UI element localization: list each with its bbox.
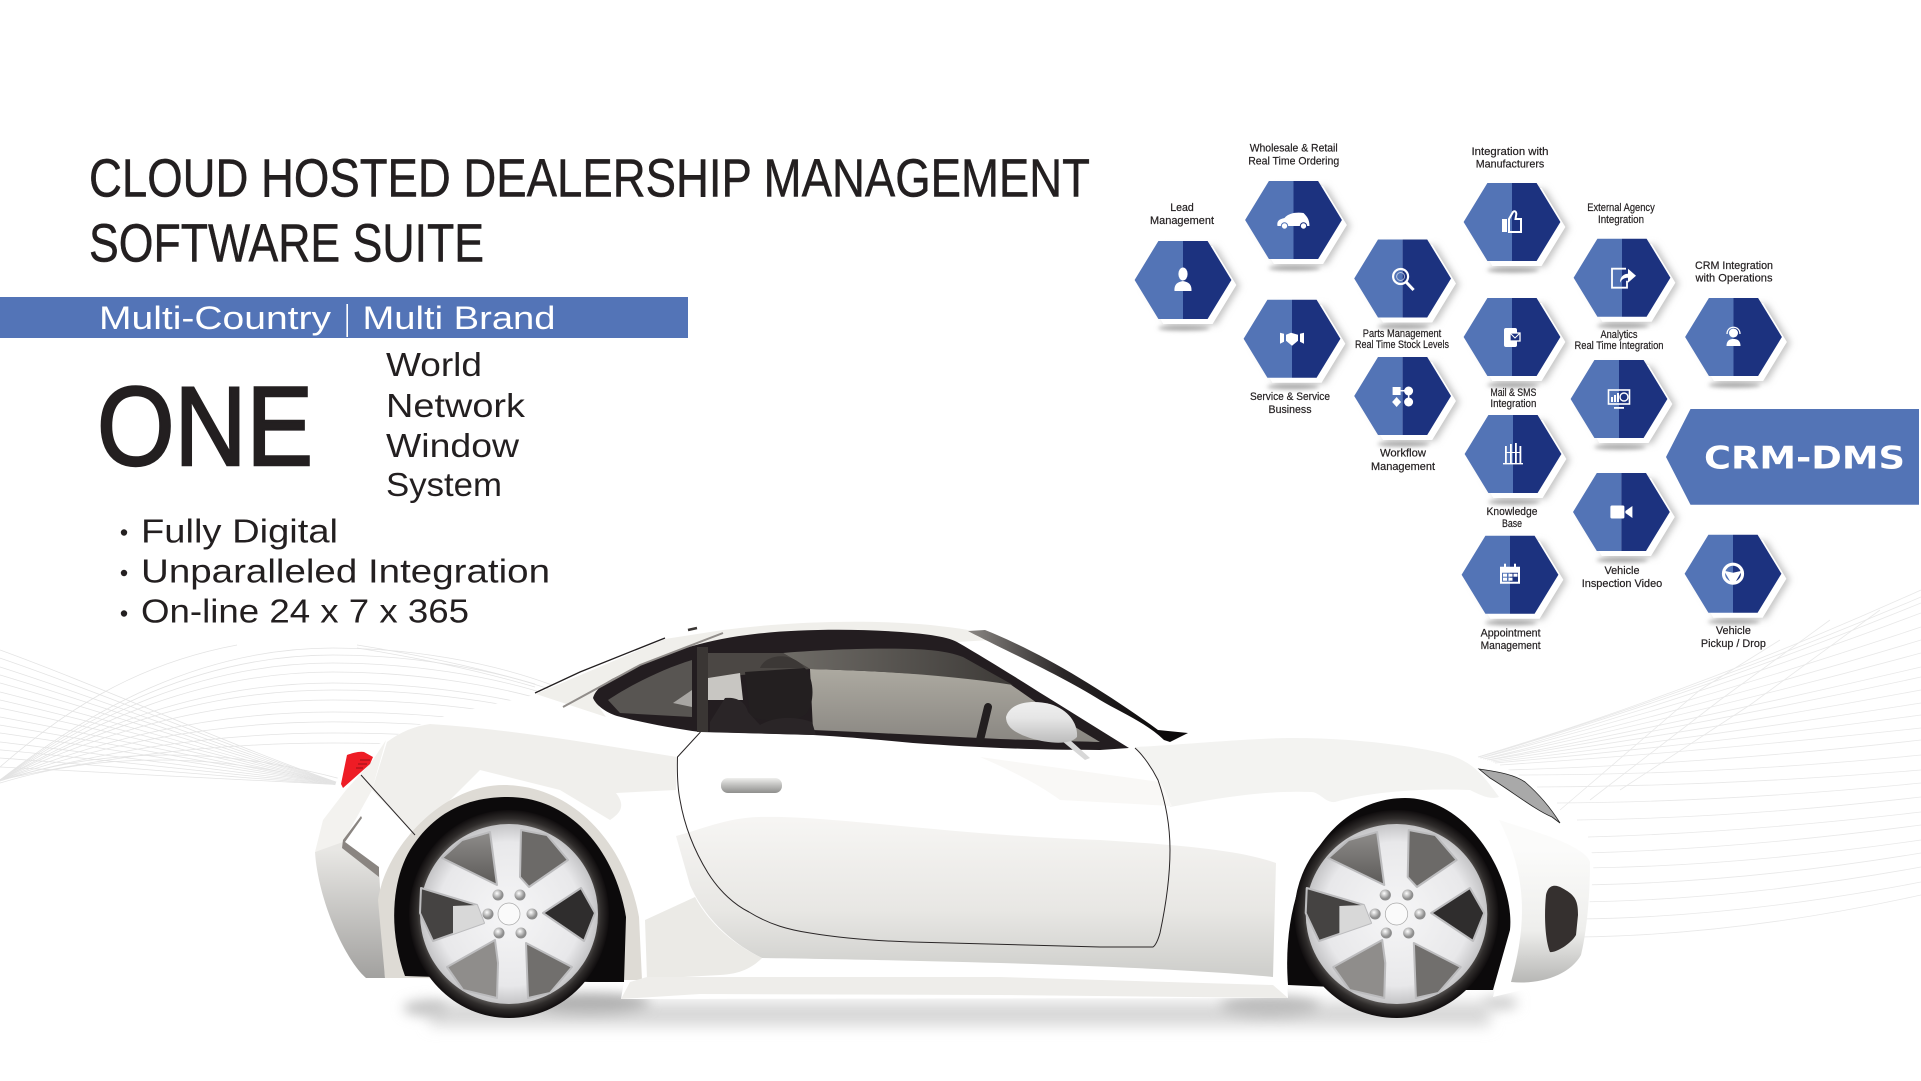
b-pillar and interior xyxy=(697,647,708,732)
label: analytics integration xyxy=(1574,329,1664,352)
text block: world network window system: Window xyxy=(386,427,519,464)
label: parts management: Parts Management xyxy=(1363,328,1441,340)
label: mail and sms xyxy=(1490,387,1536,410)
label: mail and sms: Mail & SMS xyxy=(1490,387,1536,399)
hexagon: appointment management xyxy=(1462,536,1567,625)
hexagon: service business xyxy=(1244,300,1349,389)
label: knowledge base xyxy=(1486,506,1538,530)
label: knowledge base: Base xyxy=(1502,518,1522,530)
bullet list: Fully Digital xyxy=(141,512,338,550)
banner: multi-country, multi brand: Multi Brand xyxy=(362,300,556,336)
label: vehicle inspection video: Inspection Video xyxy=(1582,578,1662,590)
label: wholesale and retail: Real Time Ordering xyxy=(1248,155,1339,167)
title: CLOUD HOSTED DEALERSHIP MANAGEMENT xyxy=(89,148,1090,208)
hexagon: vehicle pickup and drop xyxy=(1685,535,1790,624)
hexagon: knowledge base xyxy=(1465,415,1570,505)
label: external agency integration: Integration xyxy=(1598,214,1644,226)
label: appointment management: Appointment xyxy=(1481,628,1541,640)
window strut xyxy=(980,707,988,740)
bullet list: On-line 24 x 7 x 365 xyxy=(141,592,469,630)
label: appointment management: Management xyxy=(1481,640,1541,652)
label: external agency integration: External Agency xyxy=(1587,202,1655,214)
label: integration with manufacturers: Integration with xyxy=(1472,146,1548,158)
label: wholesale and retail: Wholesale & Retail xyxy=(1250,143,1338,155)
label: parts management xyxy=(1355,328,1449,351)
rear fender panel xyxy=(372,724,677,835)
bullet list: Unparalleled Integration xyxy=(141,552,550,590)
label: analytics integration: Real Time Integration xyxy=(1574,340,1664,352)
label: workflow management: Workflow xyxy=(1380,448,1426,460)
left background wave lines xyxy=(0,645,552,787)
text block: world network window system: Network xyxy=(386,387,526,424)
door shoulder shading xyxy=(980,757,1172,806)
label: mail and sms: Integration xyxy=(1490,398,1536,410)
hood highlight xyxy=(1135,738,1499,807)
label: integration with manufacturers: Manufacturers xyxy=(1476,159,1545,171)
label: vehicle pickup and drop: Pickup / Drop xyxy=(1701,638,1766,650)
roof and rear pillar highlight xyxy=(536,622,990,717)
label: lead management xyxy=(1150,202,1214,227)
label: lead management: Management xyxy=(1150,215,1214,227)
rear quarter glass xyxy=(608,660,692,717)
hexagon: integration with manufacturers xyxy=(1464,183,1569,273)
car ground shadow xyxy=(403,993,1518,1026)
rear bumper xyxy=(315,840,385,978)
title: SOFTWARE SUITE xyxy=(89,214,484,274)
label: knowledge base: Knowledge xyxy=(1486,506,1538,518)
roof trim lines xyxy=(535,628,723,707)
label: vehicle inspection video: Vehicle xyxy=(1604,565,1640,577)
heading: ONE: ONE xyxy=(97,364,313,489)
label: vehicle pickup and drop xyxy=(1701,625,1766,650)
hexagon: lead management xyxy=(1135,241,1240,331)
badge: CRM-DMS xyxy=(1666,409,1919,505)
rear wheel xyxy=(409,810,609,1018)
hexagon: vehicle inspection video xyxy=(1573,473,1679,563)
label: analytics integration: Analytics xyxy=(1600,329,1638,341)
car seat xyxy=(710,656,816,735)
car illustration xyxy=(315,620,1593,1026)
hexagon: analytics integration xyxy=(1571,360,1676,450)
front wheel arch xyxy=(1287,798,1510,990)
window frame xyxy=(593,630,1129,750)
label: appointment management xyxy=(1481,628,1541,652)
car body xyxy=(315,620,1593,999)
tinted glass band xyxy=(783,649,1013,685)
label: service business: Service & Service xyxy=(1250,391,1330,403)
hexagon: crm integration with operations xyxy=(1685,298,1791,388)
windshield xyxy=(968,630,1188,742)
front bumper xyxy=(1499,820,1590,983)
label: parts management: Real Time Stock Levels xyxy=(1355,339,1449,351)
badge: CRM-DMS: CRM-DMS xyxy=(1704,441,1905,477)
text block: world network window system: System xyxy=(386,466,502,503)
door and sill shading xyxy=(676,817,1276,977)
front wheel xyxy=(1294,810,1498,1018)
text block: world network window system xyxy=(386,346,526,503)
label: vehicle pickup and drop: Vehicle xyxy=(1716,625,1751,637)
title xyxy=(89,148,1090,274)
text block: world network window system: World xyxy=(386,346,482,383)
front air vent xyxy=(1545,886,1578,952)
label: crm integration with operations: with Operations xyxy=(1694,273,1773,285)
label: workflow management xyxy=(1371,448,1435,473)
bullet list xyxy=(121,512,550,630)
hexagon: mail and sms xyxy=(1464,298,1569,388)
rear flare xyxy=(645,897,762,979)
label: external agency integration xyxy=(1587,202,1655,226)
label: vehicle inspection video xyxy=(1582,565,1662,590)
hexagon: parts management xyxy=(1354,240,1460,329)
door outline xyxy=(677,732,1170,947)
label: wholesale and retail xyxy=(1248,143,1339,167)
hexagon: external agency integration xyxy=(1574,239,1679,328)
side sill xyxy=(621,977,1288,999)
label: crm integration with operations: CRM Integration xyxy=(1695,260,1773,272)
rear panel line xyxy=(361,775,415,835)
banner: multi-country, multi brand xyxy=(0,297,688,338)
label: lead management: Lead xyxy=(1170,202,1194,214)
label: integration with manufacturers xyxy=(1472,146,1548,171)
headlight xyxy=(1479,769,1560,823)
side glass xyxy=(810,669,1100,742)
label: service business: Business xyxy=(1268,404,1312,416)
side mirror xyxy=(1006,702,1090,760)
hexagon: wholesale and retail xyxy=(1245,181,1351,271)
right background wave lines xyxy=(1478,590,1921,937)
banner: multi-country, multi brand: Multi-Country xyxy=(99,300,331,336)
tail light xyxy=(341,752,373,788)
label: workflow management: Management xyxy=(1371,461,1435,473)
door handle xyxy=(721,778,782,793)
label: service business xyxy=(1250,391,1330,416)
label: crm integration with operations xyxy=(1694,260,1773,285)
hexagon: workflow management xyxy=(1354,357,1460,447)
rear wheel arch xyxy=(378,785,642,980)
